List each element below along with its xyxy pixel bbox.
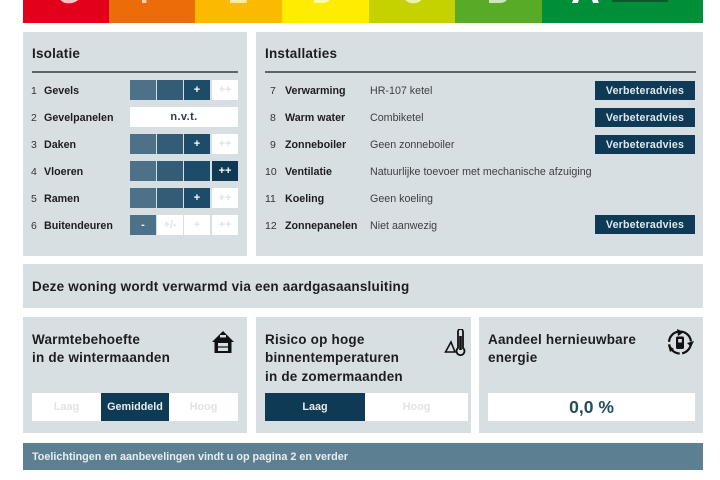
row 11 Koeling: Koeling xyxy=(285,193,324,205)
class E xyxy=(195,0,282,23)
class B xyxy=(455,0,542,23)
row 3 Daken xyxy=(31,134,238,154)
heading: Risico xyxy=(265,332,403,384)
row 7 Verwarming xyxy=(270,85,432,97)
heading: Risico: Risico op hoge xyxy=(265,332,365,346)
advice button 12 xyxy=(595,215,695,234)
row 9 Zonneboiler: 9 xyxy=(270,139,276,151)
row 1 Gevels: + xyxy=(194,84,200,96)
row 4 Vloeren: 4 xyxy=(31,166,37,178)
class D xyxy=(282,0,369,23)
row 8 Warm water: Warm water xyxy=(285,112,345,124)
row 6 Buitendeuren: 6 xyxy=(31,220,37,232)
value: 0,0 %: 0,0 % xyxy=(569,396,614,416)
panel: Aandeel hernieuwbare energie xyxy=(479,317,703,433)
banner: heating: Deze woning wordt verwarmd via een aardgasaansluiting xyxy=(32,278,409,294)
row 9 Zonneboiler xyxy=(270,139,454,151)
row 11 Koeling xyxy=(265,193,433,205)
panel: Warmtebehoefte xyxy=(23,317,247,433)
scale: Hoog inactive xyxy=(365,393,468,421)
row 5 Ramen: Ramen xyxy=(44,193,80,205)
icon: house xyxy=(212,331,234,353)
row 10 Ventilatie: Natuurlijke toevoer met mechanische afzuiging xyxy=(370,166,592,178)
row 12 Zonnepanelen: Zonnepanelen xyxy=(285,220,357,232)
row 8 Warm water: Combiketel xyxy=(370,112,423,124)
row 5 Ramen xyxy=(31,188,238,208)
scale: Hoog xyxy=(169,393,238,421)
scale: Gemiddeld xyxy=(101,393,169,421)
heading: Isolatie: Isolatie xyxy=(32,46,80,61)
row 6 Buitendeuren: - xyxy=(141,219,145,231)
energy label colour bar xyxy=(23,0,703,23)
heading: Installaties: Installaties xyxy=(265,46,337,61)
row 12 Zonnepanelen: 12 xyxy=(265,220,277,232)
row 10 Ventilatie: Ventilatie xyxy=(285,166,332,178)
heading: Risico: binnentemperaturen xyxy=(265,350,399,365)
row 12 Zonnepanelen xyxy=(265,220,437,232)
row 5 Ramen: 5 xyxy=(31,193,37,205)
row 7 Verwarming: 7 xyxy=(270,85,276,97)
class A xyxy=(542,0,703,23)
advice button 9: Verbeteradvies xyxy=(606,138,684,150)
row 6 Buitendeuren xyxy=(31,215,238,235)
scale: Gemiddeld: Gemiddeld xyxy=(107,401,163,413)
heading: Aandeel: energie xyxy=(488,350,537,365)
scale: Laag active: Laag xyxy=(302,401,328,413)
row 10 Ventilatie: 10 xyxy=(265,166,277,178)
row 5 Ramen: + xyxy=(194,192,200,204)
footer note xyxy=(23,443,703,470)
row 7 Verwarming: HR-107 ketel xyxy=(370,85,432,97)
heading: Aandeel xyxy=(488,332,636,365)
row 1 Gevels: 1 xyxy=(31,85,37,97)
row 6 Buitendeuren: + xyxy=(194,219,200,231)
row 2 Gevelpanelen xyxy=(31,107,238,127)
row 6 Buitendeuren: ++ xyxy=(219,219,231,231)
row 11 Koeling: 11 xyxy=(265,193,276,205)
advice button 7 xyxy=(595,81,695,100)
row 4 Vloeren xyxy=(31,161,238,181)
row 4 Vloeren: Vloeren xyxy=(44,166,83,178)
icon: renewable cycle xyxy=(668,329,694,355)
heading: Warmtebehoefte: in de wintermaanden xyxy=(32,350,170,365)
advice button 7: Verbeteradvies xyxy=(606,84,684,96)
panel: Isolatie xyxy=(23,32,247,256)
heading: Aandeel: Aandeel hernieuwbare xyxy=(488,332,636,346)
row 3 Daken: ++ xyxy=(219,138,231,150)
row 1 Gevels: Gevels xyxy=(44,85,79,97)
advice button 9 xyxy=(595,135,695,154)
scale: Hoog: Hoog xyxy=(190,401,217,413)
scale: Laag xyxy=(32,393,101,421)
icon: thermometer with warning xyxy=(444,329,466,356)
row 6 Buitendeuren: +/- xyxy=(163,219,177,231)
panel: Installaties xyxy=(256,32,703,256)
scale: Hoog inactive: Hoog xyxy=(403,401,430,413)
row 9 Zonneboiler: Geen zonneboiler xyxy=(370,139,454,151)
advice button 8: Verbeteradvies xyxy=(606,112,684,124)
footer note: Toelichtingen en aanbevelingen vindt u op pagina 2 en verder xyxy=(32,450,348,462)
row 3 Daken: Daken xyxy=(44,139,76,151)
scale: Laag active xyxy=(265,393,365,421)
row 10 Ventilatie xyxy=(265,166,592,178)
row 7 Verwarming: Verwarming xyxy=(285,85,346,97)
heading: Warmtebehoefte: Warmtebehoefte xyxy=(32,332,140,346)
row 1 Gevels: ++ xyxy=(219,84,231,96)
class F xyxy=(109,0,195,23)
row 11 Koeling: Geen koeling xyxy=(370,193,433,205)
row 8 Warm water xyxy=(270,112,423,124)
scale: Laag: Laag xyxy=(54,401,79,413)
row 2 Gevelpanelen: 2 xyxy=(31,112,37,124)
class C xyxy=(369,0,455,23)
advice button 12: Verbeteradvies xyxy=(606,218,684,230)
row 2 Gevelpanelen: n.v.t. xyxy=(170,111,198,123)
row 12 Zonnepanelen: Niet aanwezig xyxy=(370,220,437,232)
row 3 Daken: 3 xyxy=(31,139,37,151)
row 3 Daken: + xyxy=(194,138,200,150)
row 2 Gevelpanelen: Gevelpanelen xyxy=(44,112,114,124)
row 6 Buitendeuren: Buitendeuren xyxy=(44,220,113,232)
banner: heating xyxy=(23,264,703,308)
class G xyxy=(23,0,109,23)
heading: Risico: in de zomermaanden xyxy=(265,368,403,384)
row 5 Ramen: ++ xyxy=(219,192,231,204)
row 4 Vloeren: ++ xyxy=(219,165,231,177)
row 8 Warm water: 8 xyxy=(270,112,276,124)
row 9 Zonneboiler: Zonneboiler xyxy=(285,139,346,151)
advice button 8 xyxy=(595,108,695,127)
panel: Risico xyxy=(256,317,471,433)
value: 0,0 % xyxy=(488,393,695,421)
heading: Warmtebehoefte xyxy=(32,332,170,365)
row 1 Gevels xyxy=(31,80,238,100)
